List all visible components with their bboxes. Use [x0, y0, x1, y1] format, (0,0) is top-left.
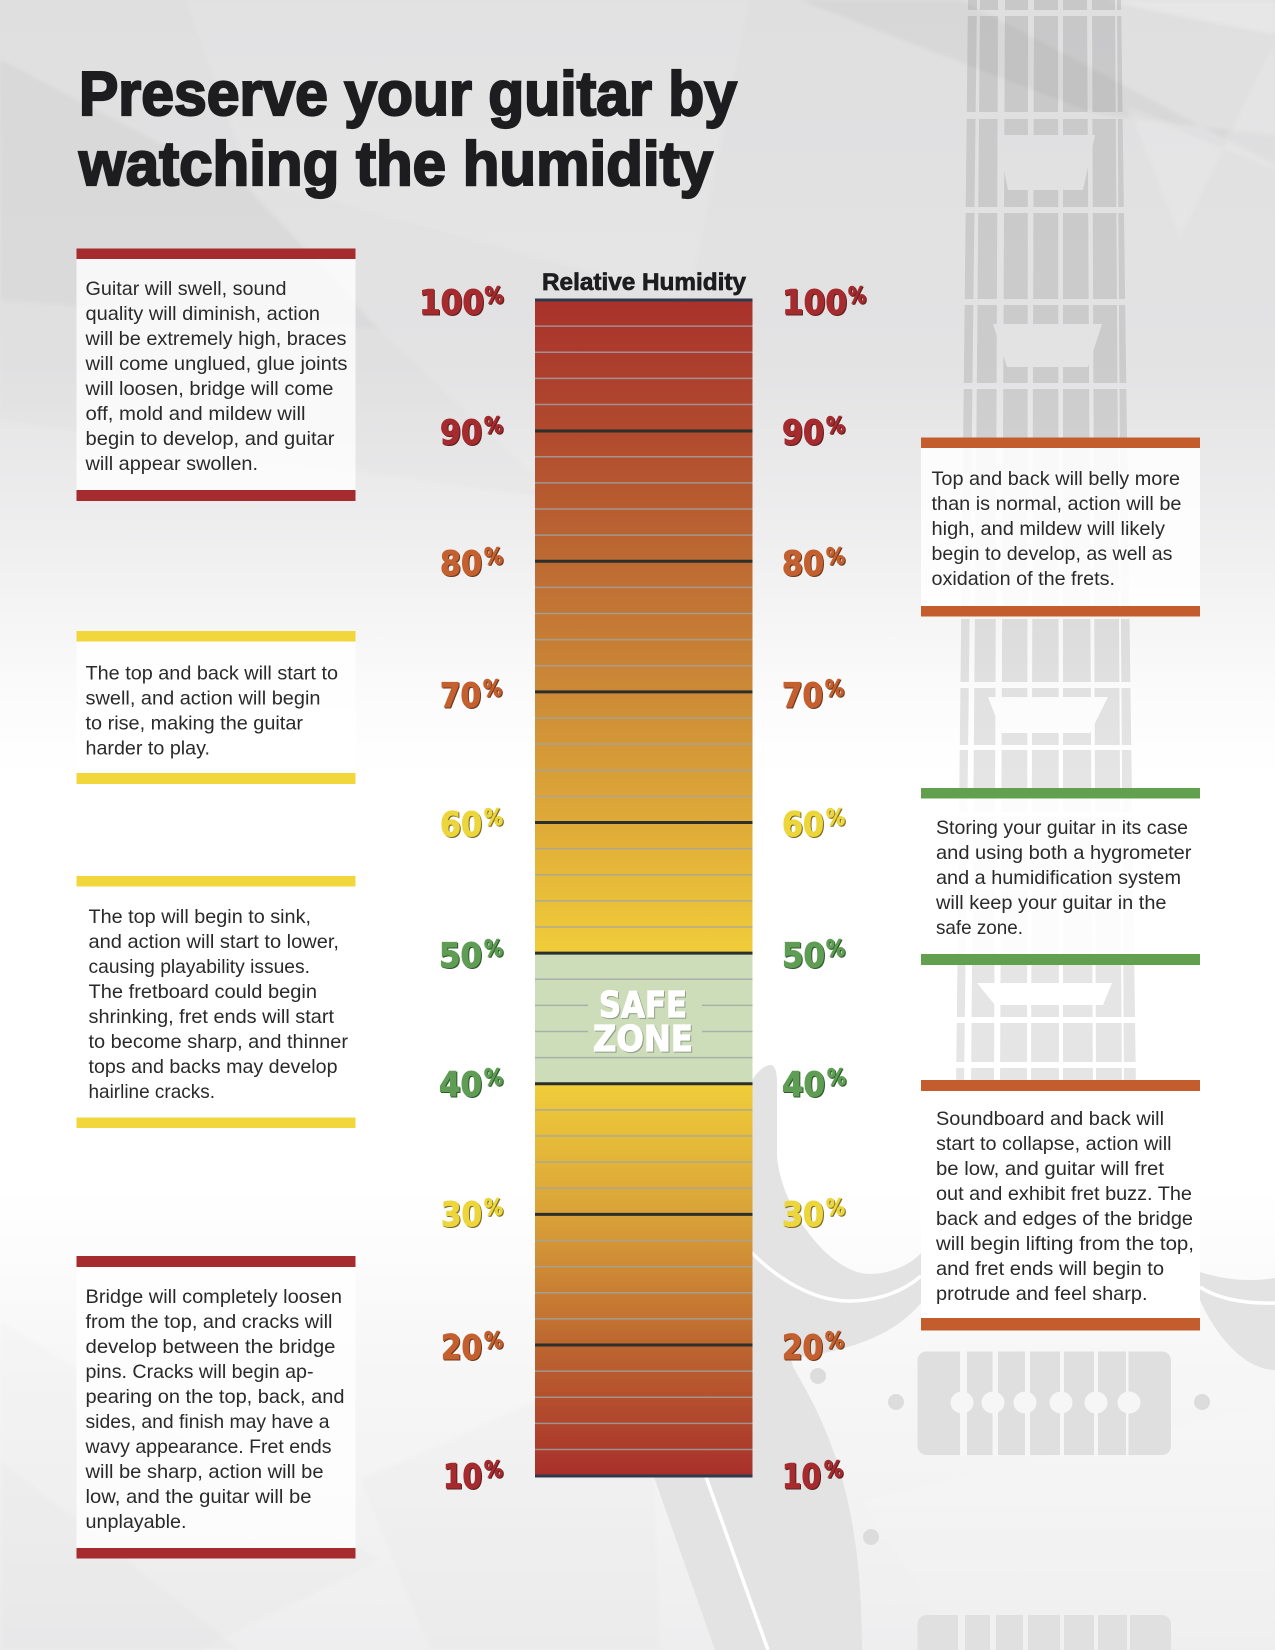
20% left: % — [484, 1329, 503, 1354]
60% left: 60 — [440, 805, 482, 845]
title: watching the humidity — [78, 130, 714, 199]
title: Preserve your guitar by — [79, 60, 737, 129]
panel: 20-30% humidity effects — [921, 1080, 1200, 1330]
70% right: 70 — [782, 676, 823, 716]
30% right: % — [826, 1196, 845, 1221]
guitar neck and frets — [956, 0, 1136, 1090]
panel: 70-90% humidity effects: high, and mildew will likely — [932, 518, 1165, 540]
safe zone label: SAFE — [599, 985, 687, 1026]
minor tick lines — [535, 326, 752, 1450]
panel: 70-90% humidity effects: than is normal, action will be — [932, 493, 1182, 515]
panel: below 20% humidity effects: wavy appearance. Fret ends — [85, 1436, 332, 1458]
panel: 60-70% humidity effects: harder to play. — [86, 738, 210, 760]
panel: 30-40% humidity effects: tops and backs may develop — [88, 1056, 338, 1078]
guitar body left horn — [654, 1065, 921, 1650]
40% right: 40 — [782, 1065, 825, 1105]
panel: 70-90% humidity effects: oxidation of the frets. — [932, 568, 1115, 590]
guitar silhouette — [654, 0, 1275, 1650]
30% left: 30 — [441, 1195, 482, 1235]
70% left: % — [483, 677, 502, 702]
panel: above 90% humidity effects — [76, 248, 356, 501]
90% right: 90 — [782, 413, 824, 453]
panel: safe zone storage advice: and using both a hygrometer — [936, 842, 1192, 864]
gradient column — [535, 300, 752, 1476]
left percentage labels — [419, 283, 504, 1497]
panel: 20-30% humidity effects: will begin lifting from the top, — [935, 1233, 1194, 1255]
80% left: % — [484, 545, 503, 570]
panel: 20-30% humidity effects: Soundboard and back will — [936, 1108, 1164, 1130]
panel: 30-40% humidity effects: The fretboard could begin — [88, 981, 317, 1003]
panel: safe zone storage advice — [921, 788, 1200, 965]
70% right: % — [825, 677, 844, 702]
panel: 20-30% humidity effects: back and edges of the bridge — [936, 1208, 1193, 1230]
panel: above 90% humidity effects: Guitar will swell, sound — [86, 278, 286, 300]
right percentage labels — [782, 283, 866, 1497]
guitar mounting screws — [810, 1368, 1210, 1545]
60% right: 60 — [782, 805, 824, 845]
panel: safe zone storage advice: will keep your guitar in the — [935, 892, 1166, 914]
title — [78, 60, 737, 199]
panel: 20-30% humidity effects: start to collapse, action will — [936, 1133, 1172, 1155]
panel: below 20% humidity effects: will be sharp, action will be — [84, 1461, 324, 1483]
safe zone label: ZONE — [593, 1019, 693, 1060]
20% right: % — [825, 1329, 844, 1354]
panel: above 90% humidity effects: off, mold and mildew will — [86, 403, 306, 425]
panel: below 20% humidity effects: Bridge will completely loosen — [86, 1286, 342, 1308]
panel: safe zone storage advice: and a humidification system — [936, 867, 1181, 889]
80% right: % — [826, 545, 845, 570]
20% right: 20 — [782, 1328, 823, 1368]
chart heading: Relative Humidity — [542, 269, 747, 296]
panel: 60-70% humidity effects: to rise, making the guitar — [86, 712, 304, 734]
100% left: 100 — [419, 283, 484, 323]
panel: below 20% humidity effects: develop between the bridge — [86, 1336, 336, 1358]
50% right: 50 — [782, 936, 825, 976]
panel: 20-30% humidity effects: protrude and feel sharp. — [936, 1283, 1148, 1305]
10% right: % — [824, 1458, 843, 1483]
30% left: % — [484, 1196, 503, 1221]
70% left: 70 — [440, 676, 481, 716]
humidity scale bar — [535, 300, 752, 1476]
panel: above 90% humidity effects: begin to develop, and guitar — [86, 428, 335, 450]
50% left: % — [484, 937, 503, 962]
90% left: 90 — [440, 413, 482, 453]
panel: 20-30% humidity effects: be low, and guitar will fret — [936, 1158, 1165, 1180]
50% left: 50 — [439, 936, 482, 976]
panel: below 20% humidity effects: unplayable. — [86, 1511, 186, 1533]
panel: 30-40% humidity effects: shrinking, fret ends will start — [88, 1006, 335, 1028]
panel: 70-90% humidity effects: begin to develop, as well as — [932, 543, 1173, 565]
30% right: 30 — [782, 1195, 824, 1235]
20% left: 20 — [441, 1328, 482, 1368]
panel: 60-70% humidity effects: The top and back will start to — [86, 662, 338, 684]
90% right: % — [826, 414, 845, 439]
panel: below 20% humidity effects: sides, and finish may have a — [86, 1411, 330, 1433]
panel: 30-40% humidity effects — [76, 876, 356, 1128]
panel: 30-40% humidity effects: hairline cracks. — [88, 1081, 215, 1103]
80% left: 80 — [440, 544, 482, 584]
panel: 30-40% humidity effects: and action will start to lower, — [88, 931, 339, 953]
panel: below 20% humidity effects: pins. Cracks will begin ap- — [86, 1361, 314, 1383]
scale end caps — [535, 300, 752, 1476]
10% left: % — [484, 1458, 503, 1483]
panel: below 20% humidity effects: from the top, and cracks will — [86, 1311, 332, 1333]
panel: below 20% humidity effects: pearing on the top, back, and — [86, 1386, 344, 1408]
panel: above 90% humidity effects: quality will diminish, action — [86, 303, 320, 325]
major tick lines — [535, 431, 752, 1345]
panel: 30-40% humidity effects: to become sharp, and thinner — [88, 1031, 349, 1053]
panel: above 90% humidity effects: will loosen, bridge will come — [84, 378, 334, 400]
40% right: % — [827, 1066, 846, 1091]
40% left: 40 — [439, 1065, 482, 1105]
panel: above 90% humidity effects: will appear swollen. — [84, 453, 258, 475]
50% right: % — [826, 937, 845, 962]
panel: below 20% humidity effects — [76, 1256, 356, 1558]
panel: 30-40% humidity effects: causing playability issues. — [88, 956, 310, 978]
panel: below 20% humidity effects: low, and the guitar will be — [86, 1486, 312, 1508]
10% right: 10 — [782, 1457, 821, 1497]
panel: 70-90% humidity effects: Top and back will belly more — [932, 468, 1180, 490]
panel: 30-40% humidity effects: The top will begin to sink, — [88, 906, 311, 928]
guitar pickup lower — [918, 1615, 1171, 1650]
100% left: % — [484, 284, 504, 309]
40% left: % — [484, 1066, 503, 1091]
body edge lines — [706, 1240, 1275, 1650]
safe zone band — [535, 953, 752, 1084]
panel: above 90% humidity effects: will be extremely high, braces — [84, 328, 347, 350]
80% right: 80 — [782, 544, 824, 584]
panel: 60-70% humidity effects: swell, and action will begin — [86, 688, 320, 710]
safe zone label — [593, 985, 693, 1060]
panel: safe zone storage advice: Storing your guitar in its case — [936, 817, 1188, 839]
panel: 20-30% humidity effects: out and exhibit fret buzz. The — [936, 1183, 1192, 1205]
10% left: 10 — [443, 1457, 482, 1497]
panel: 60-70% humidity effects — [76, 631, 356, 784]
100% right: 100 — [782, 283, 847, 323]
100% right: % — [848, 284, 866, 309]
panel: 70-90% humidity effects — [921, 438, 1200, 616]
60% left: % — [484, 806, 503, 831]
60% right: % — [826, 806, 845, 831]
panel: above 90% humidity effects: will come unglued, glue joints — [84, 353, 348, 375]
guitar body right horn — [1200, 1272, 1275, 1370]
panel: 20-30% humidity effects: and fret ends will begin to — [936, 1258, 1164, 1280]
panel: safe zone storage advice: safe zone. — [936, 917, 1023, 939]
guitar pickup upper — [918, 1351, 1171, 1456]
90% left: % — [484, 414, 503, 439]
